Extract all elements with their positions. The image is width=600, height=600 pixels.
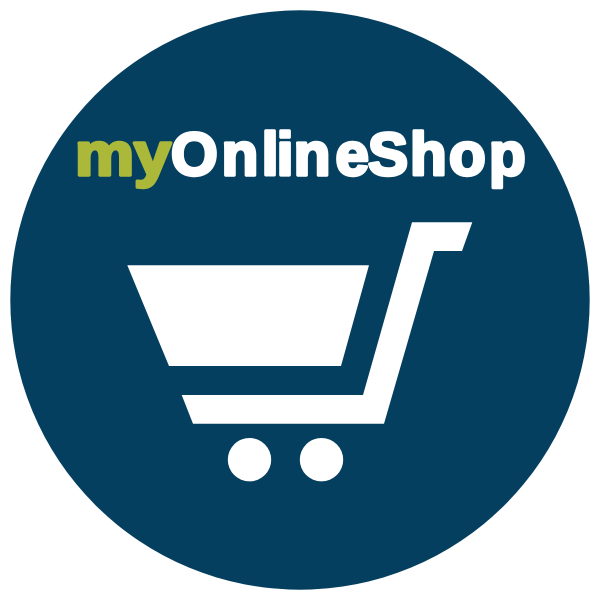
- wordmark: OnlineShop: OnlineShop: [171, 121, 526, 188]
- cart basket: [127, 265, 369, 366]
- icon: shopping cart: [127, 222, 472, 481]
- cart left wheel: [228, 438, 271, 481]
- wordmark: my: my: [75, 121, 172, 188]
- cart handle and frame: [182, 222, 472, 424]
- title: myOnlineShop wordmark: [75, 121, 526, 188]
- cart right wheel: [300, 438, 343, 481]
